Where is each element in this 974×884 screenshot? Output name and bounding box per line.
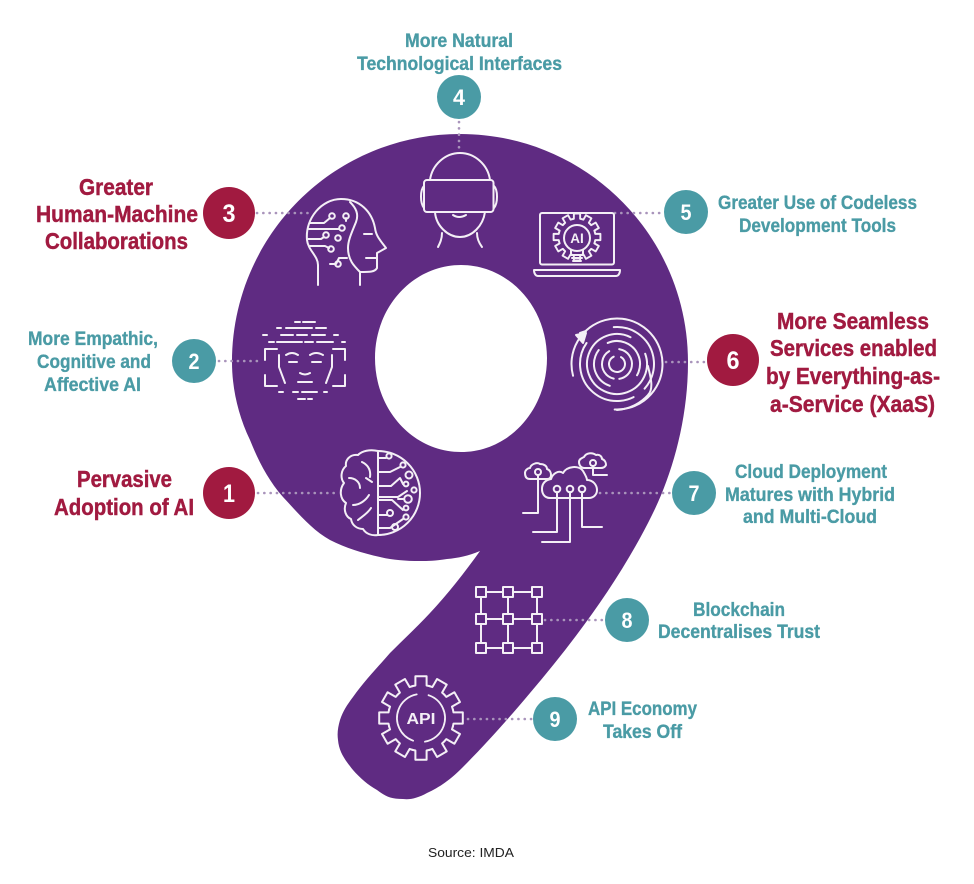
- connector 6: [666, 361, 706, 363]
- label 2: Cognitive and: [37, 351, 151, 373]
- label 1: [54, 466, 194, 520]
- label 5: Development Tools: [739, 215, 896, 237]
- label 6: a-Service (XaaS): [770, 391, 935, 417]
- connector 4: [458, 122, 460, 150]
- label 8: [658, 599, 820, 643]
- number badge 2: [172, 339, 216, 383]
- number badge 8: [605, 598, 649, 642]
- source note: Source: IMDA: [428, 845, 514, 860]
- trend 1: pervasive adoption of AI: [54, 450, 420, 535]
- number badge 2: 2: [188, 349, 200, 374]
- label 9: API Economy: [588, 698, 697, 720]
- number badge 5: 5: [680, 200, 692, 225]
- label 4: Technological Interfaces: [357, 53, 562, 75]
- trend 2: empathic AI: [28, 322, 345, 399]
- label 7: [725, 461, 895, 528]
- number badge 9: [533, 697, 577, 741]
- label 6: [766, 308, 940, 417]
- number badge 1: [203, 467, 255, 519]
- number badge 8: 8: [622, 608, 632, 633]
- icon: cloud network: [523, 453, 607, 542]
- trend 6: seamless services XaaS: [561, 308, 940, 420]
- label 6: Services enabled: [770, 335, 937, 361]
- icon: face scan: [263, 322, 345, 399]
- icon: laptop with AI gear and bulb: AI: [570, 231, 584, 246]
- number badge 3: 3: [222, 200, 236, 228]
- label 2: [28, 328, 158, 396]
- label 2: More Empathic,: [28, 328, 158, 350]
- label 6: More Seamless: [777, 308, 929, 334]
- trend 9: API economy: [379, 676, 697, 760]
- trend 5: codeless development tools: [534, 190, 917, 276]
- trend 4: natural interfaces: [357, 30, 562, 247]
- number badge 6: 6: [726, 347, 740, 375]
- icon: block grid: [476, 587, 542, 653]
- purple numeral nine: [232, 134, 688, 799]
- label 5: Greater Use of Codeless: [718, 192, 917, 214]
- number badge 6: [707, 334, 759, 386]
- trend 8: blockchain: [476, 587, 820, 653]
- label 4: More Natural: [405, 30, 513, 52]
- label 7: Cloud Deployment: [735, 461, 887, 483]
- label 1: Adoption of AI: [54, 494, 194, 520]
- number badge 9: 9: [550, 707, 560, 732]
- label 9: [588, 698, 697, 743]
- label 1: Pervasive: [77, 466, 172, 492]
- label 3: Human-Machine: [36, 201, 198, 227]
- icon: laptop with AI gear and bulb: [534, 213, 620, 276]
- label 8: Decentralises Trust: [658, 621, 820, 643]
- label 5: [718, 192, 917, 237]
- label 3: Collaborations: [45, 228, 188, 254]
- label 3: Greater: [79, 174, 153, 200]
- number badge 7: [672, 471, 716, 515]
- icon: AI head: [307, 199, 386, 285]
- icon: API gear: API: [406, 711, 436, 728]
- trend 7: hybrid and multi-cloud: [523, 453, 895, 542]
- number badge 4: [437, 75, 481, 119]
- label 7: and Multi-Cloud: [743, 506, 877, 528]
- connector 7: [600, 492, 672, 494]
- number badge 4: 4: [453, 85, 466, 110]
- icon: brain with circuits: [341, 450, 420, 535]
- connector 5: [615, 212, 664, 214]
- number badge 1: 1: [223, 480, 235, 508]
- number badge 7: 7: [688, 481, 700, 506]
- label 6: by Everything-as-: [766, 363, 940, 389]
- trend 3: human-machine collaborations: [36, 174, 386, 285]
- connector 9: [468, 718, 533, 720]
- number badge 5: [664, 190, 708, 234]
- icon: concentric spiral: [561, 308, 673, 420]
- connector 8: [545, 619, 605, 621]
- connector 2: [219, 360, 262, 362]
- label 4: [357, 30, 562, 75]
- label 8: Blockchain: [693, 599, 785, 621]
- label 3: [36, 174, 198, 254]
- icon: VR headset: [421, 153, 497, 247]
- icon: API gear: [379, 676, 463, 760]
- label 7: Matures with Hybrid: [725, 484, 895, 506]
- label 9: Takes Off: [603, 721, 682, 743]
- connector 3: [257, 212, 310, 214]
- connector 1: [258, 492, 338, 494]
- number badge 3: [203, 187, 255, 239]
- label 2: Affective AI: [44, 374, 141, 396]
